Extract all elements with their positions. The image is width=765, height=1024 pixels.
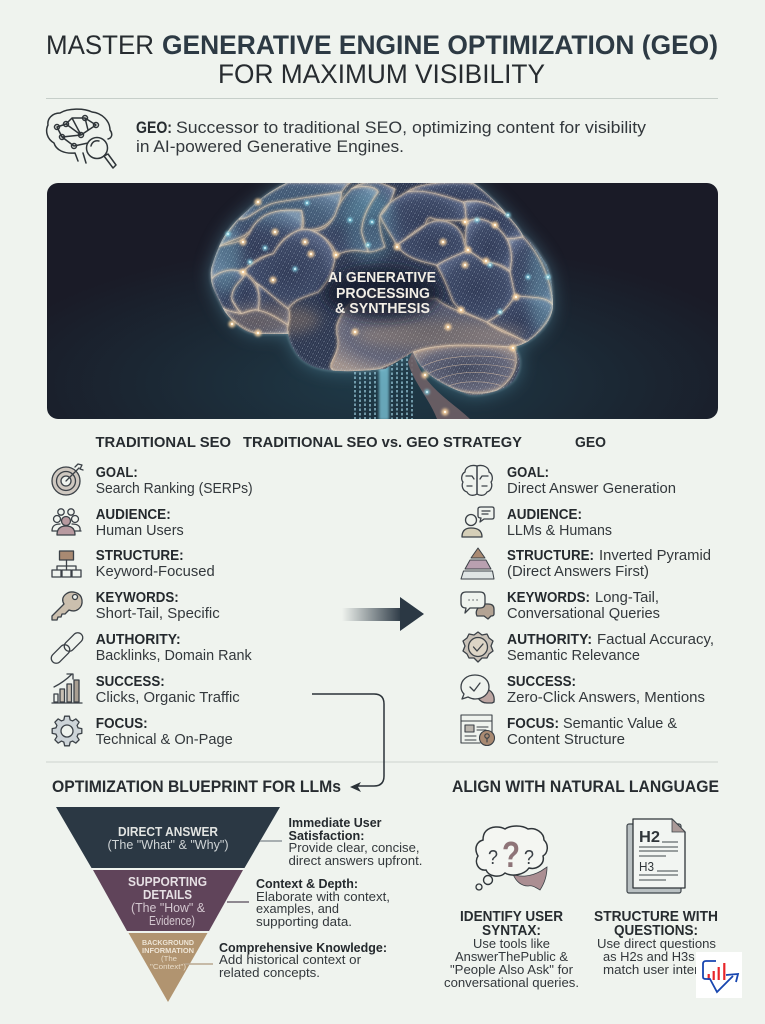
icon: thought bubble with question marks: ?	[502, 834, 520, 875]
brain folds	[205, 180, 563, 400]
item: focus: Semantic Value &	[563, 716, 677, 732]
callout: immediate user satisfaction	[260, 815, 422, 868]
item: goal	[52, 464, 253, 497]
intro text: in AI-powered Generative Engines.	[136, 138, 404, 156]
brain caption: & SYNTHESIS	[335, 301, 430, 317]
item: structure: STRUCTURE:	[96, 548, 184, 564]
icon: thought bubble with question marks	[476, 826, 547, 890]
heading: natural language: ALIGN WITH NATURAL LANGUAGE	[452, 777, 719, 796]
title	[46, 30, 718, 89]
item: success: SUCCESS:	[507, 674, 576, 690]
panel: traditional SEO column	[49, 464, 253, 748]
icon: thought bubble with question marks: ?	[524, 847, 534, 869]
brain body	[211, 182, 553, 395]
item: authority: AUTHORITY:	[507, 632, 592, 648]
arrow: SEO to GEO	[342, 597, 424, 631]
item: goal: GOAL:	[507, 465, 549, 481]
text: structure with questions: Use direct questions	[597, 936, 717, 951]
item: audience: AUDIENCE:	[96, 507, 171, 523]
item: keywords: Short-Tail, Specific	[96, 606, 220, 622]
item: authority: AUTHORITY:	[96, 632, 181, 648]
icon: thought bubble with question marks: ?	[488, 847, 498, 869]
callout: immediate user satisfaction: Provide clear, concise,	[288, 840, 420, 855]
tier: background information: BACKGROUND	[142, 940, 194, 947]
text: structure with questions: STRUCTURE WITH	[594, 909, 718, 925]
chart: inverted pyramid	[56, 807, 280, 1002]
item: focus: Content Structure	[507, 732, 625, 748]
tier: background information	[128, 933, 208, 1002]
callout: comprehensive knowledge: Add historical context or	[219, 952, 362, 967]
tier: background information: INFORMATION	[142, 948, 194, 955]
item: focus: Technical & On-Page	[96, 732, 233, 748]
callout: context and depth: examples, and	[256, 901, 339, 916]
text: identify user syntax: SYNTAX:	[482, 923, 541, 939]
item: authority	[49, 631, 252, 665]
callout: immediate user satisfaction: Immediate User	[288, 815, 382, 830]
item: success: SUCCESS:	[96, 674, 165, 690]
brain stem	[408, 350, 470, 419]
glowing nodes	[228, 202, 548, 412]
text: identify user syntax: conversational queries.	[444, 975, 579, 990]
item: keywords: Conversational Queries	[507, 606, 660, 622]
item: success	[461, 674, 705, 706]
callout: immediate user satisfaction: Satisfaction:	[288, 828, 364, 843]
icon: document with H2 and H3: H3	[639, 859, 654, 874]
item: success: Clicks, Organic Traffic	[96, 690, 240, 706]
item: audience	[52, 507, 184, 539]
tier: supporting details: SUPPORTING	[128, 874, 207, 889]
tier: background information: (The	[161, 956, 177, 963]
tier: direct answer: (The "What" & "Why")	[108, 837, 228, 852]
item: focus: FOCUS:	[507, 716, 559, 732]
brain caption: AI GENERATIVE	[328, 270, 436, 286]
item: focus	[461, 715, 677, 748]
item: audience: AUDIENCE:	[507, 507, 582, 523]
text: identify user syntax: IDENTIFY USER	[460, 909, 563, 925]
item: keywords: Long-Tail,	[595, 590, 659, 606]
callout: context and depth: supporting data.	[256, 914, 352, 929]
item: authority	[463, 632, 714, 664]
text: structure with questions: as H2s and H3s to	[603, 949, 709, 964]
item: focus	[52, 716, 233, 748]
item: keywords	[52, 590, 220, 622]
arrow: connector to blueprint	[312, 694, 384, 792]
text: identify user syntax	[444, 909, 579, 990]
item: authority: Factual Accuracy,	[597, 632, 714, 648]
tier: supporting details: Evidence)	[149, 913, 195, 928]
item: goal	[462, 465, 676, 497]
tier: supporting details: (The "How" &	[131, 900, 205, 915]
tier: supporting details: DETAILS	[143, 887, 192, 902]
item: structure: Keyword-Focused	[96, 564, 215, 580]
icon: document with H2 and H3	[627, 819, 685, 893]
icon: document with H2 and H3: H2	[639, 829, 660, 846]
logo badge	[696, 952, 742, 998]
tier: direct answer: DIRECT ANSWER	[118, 824, 219, 839]
callout: comprehensive knowledge	[185, 940, 387, 980]
comparison headings: TRADITIONAL SEO	[96, 434, 231, 451]
callout: comprehensive knowledge: Comprehensive Knowledge:	[219, 940, 387, 955]
glowing fold lines	[211, 182, 553, 393]
intro text	[136, 119, 647, 156]
item: structure: Inverted Pyramid	[599, 548, 711, 564]
callout: immediate user satisfaction: direct answers upfront.	[288, 853, 422, 868]
item: success	[52, 674, 240, 706]
text: identify user syntax: "People Also Ask" for	[450, 962, 574, 977]
brain caption	[328, 272, 436, 313]
comparison headings: TRADITIONAL SEO vs. GEO STRATEGY	[243, 434, 522, 451]
item: keywords: KEYWORDS:	[507, 590, 590, 606]
item: structure: (Direct Answers First)	[507, 564, 649, 580]
item: goal: Search Ranking (SERPs)	[96, 481, 253, 497]
item: success: Zero-Click Answers, Mentions	[507, 690, 705, 706]
brain caption: PROCESSING	[336, 286, 430, 302]
text: structure with questions: match user intent.	[603, 962, 709, 977]
item: audience: LLMs & Humans	[507, 523, 612, 539]
data column	[354, 355, 413, 419]
comparison headings: GEO	[575, 434, 606, 451]
item: goal: Direct Answer Generation	[507, 481, 676, 497]
item: structure	[52, 548, 215, 580]
heading: optimization blueprint: OPTIMIZATION BLUEPRINT FOR LLMs	[52, 777, 341, 796]
callout: comprehensive knowledge: related concepts.	[219, 965, 320, 980]
intro text: Successor to traditional SEO, optimizing content for visibility	[176, 119, 647, 137]
item: authority: Semantic Relevance	[507, 648, 640, 664]
title: GENERATIVE ENGINE OPTIMIZATION (GEO)	[162, 30, 718, 60]
item: structure	[461, 548, 711, 580]
brain glow	[211, 182, 553, 395]
item: keywords: KEYWORDS:	[96, 590, 179, 606]
intro text: GEO:	[136, 119, 172, 137]
tier: supporting details	[93, 870, 243, 931]
item: audience: Human Users	[96, 523, 184, 539]
item: audience	[462, 507, 612, 539]
item: authority: Backlinks, Domain Rank	[96, 648, 252, 664]
panel: AI brain hero image	[47, 180, 718, 420]
icon: brain with magnifier	[47, 109, 116, 168]
item: goal: GOAL:	[96, 465, 138, 481]
callout: context and depth: Elaborate with context,	[256, 889, 390, 904]
item: keywords	[461, 590, 660, 622]
text: identify user syntax: Use tools like	[473, 936, 550, 951]
text: identify user syntax: AnswerThePublic &	[455, 949, 568, 964]
title: FOR MAXIMUM VISIBILITY	[218, 59, 545, 89]
text: structure with questions: QUESTIONS:	[614, 923, 698, 939]
tier: direct answer	[56, 807, 280, 868]
text: structure with questions	[594, 909, 718, 977]
comparison headings	[96, 434, 606, 451]
item: focus: FOCUS:	[96, 716, 148, 732]
tier: background information: "Context")	[150, 964, 186, 971]
title: MASTER	[46, 30, 154, 60]
brain rim	[211, 182, 553, 395]
panel: GEO column	[461, 465, 714, 748]
callout: context and depth: Context & Depth:	[256, 876, 358, 891]
item: structure: STRUCTURE:	[507, 548, 594, 564]
callout: context and depth	[227, 876, 390, 929]
